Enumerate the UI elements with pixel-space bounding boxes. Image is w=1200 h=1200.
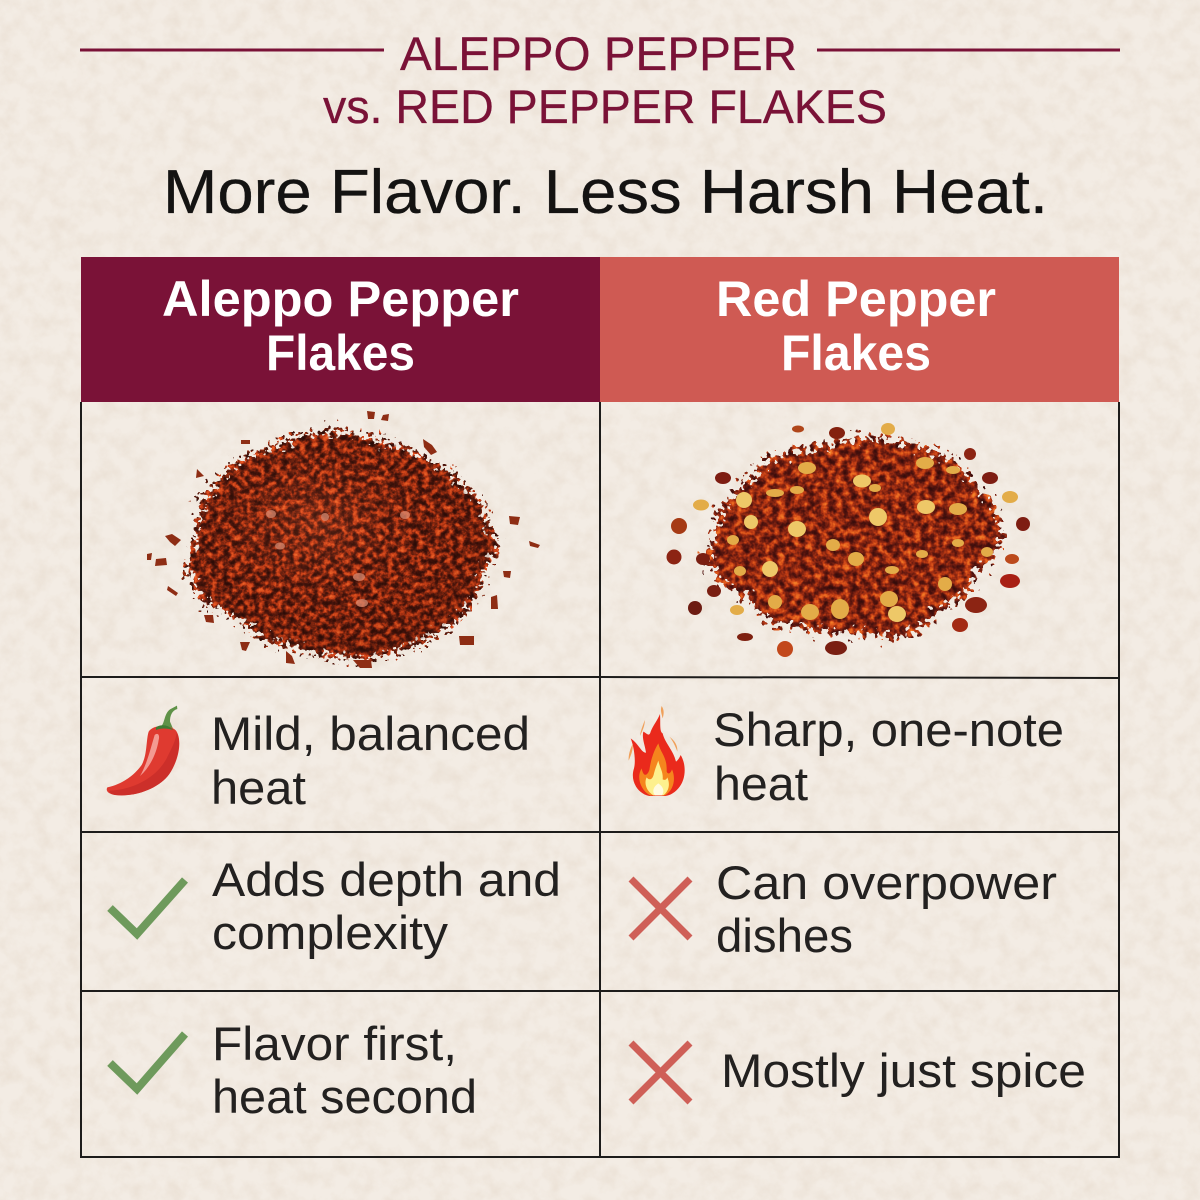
row 1 left: chili pepper icon and text: heat [211,761,306,814]
icon: check mark [110,880,185,934]
comparison table header: Aleppo Pepper Flakes: Flakes [266,325,415,381]
loose flakes [147,411,540,668]
seeds [693,423,1018,622]
table grid lines [81,402,1119,1157]
row 2 right: cross and text: Can overpower [716,856,1057,909]
title: Aleppo Pepper vs. Red Pepper Flakes: ALEPPO PEPPER [400,27,797,80]
comparison table header: Aleppo Pepper Flakes [81,257,600,402]
title: Aleppo Pepper vs. Red Pepper Flakes: vs. RED PEPPER FLAKES [323,80,887,133]
icon: flame [629,706,685,796]
comparison table header: Aleppo Pepper Flakes: Aleppo Pepper [162,271,519,327]
row 2 left: check mark and text: complexity [212,906,449,959]
row 2 right: cross and text: dishes [716,909,853,962]
row 3 right: cross and text [631,1043,1086,1102]
row 3 left: check mark and text [110,1017,477,1123]
title: Aleppo Pepper vs. Red Pepper Flakes [80,27,1120,133]
icon: chili pepper [107,706,179,795]
row 3 left: check mark and text: heat second [212,1070,477,1123]
loose flakes around the pile [666,426,1030,657]
comparison table header: Red Pepper Flakes [600,257,1119,402]
row 1 left: chili pepper icon and text [107,706,530,814]
row 1 right: flame icon and text: Sharp, one-note [713,703,1064,756]
row 1 right: flame icon and text: heat [714,757,808,810]
comparison table header: Red Pepper Flakes: Flakes [781,325,931,381]
image: pile of Aleppo pepper flakes [147,411,540,668]
pale highlights on the pile [266,510,410,607]
row 3 left: check mark and text: Flavor first, [212,1017,457,1070]
row 2 left: check mark and text: Adds depth and [212,853,561,906]
image: pile of red pepper flakes with seeds [666,423,1030,657]
row 2 right: cross and text [631,856,1057,962]
row 1 left: chili pepper icon and text: Mild, balanced [211,707,530,760]
comparison table header: Red Pepper Flakes: Red Pepper [716,271,996,327]
icon: cross [631,1043,690,1102]
row 2 left: check mark and text [110,853,561,959]
icon: check mark [110,1034,185,1089]
icon: cross [631,879,690,938]
row 3 right: cross and text: Mostly just spice [721,1044,1086,1097]
subtitle: More Flavor. Less Harsh Heat. [163,158,1048,227]
row 1 right: flame icon and text [629,703,1064,810]
